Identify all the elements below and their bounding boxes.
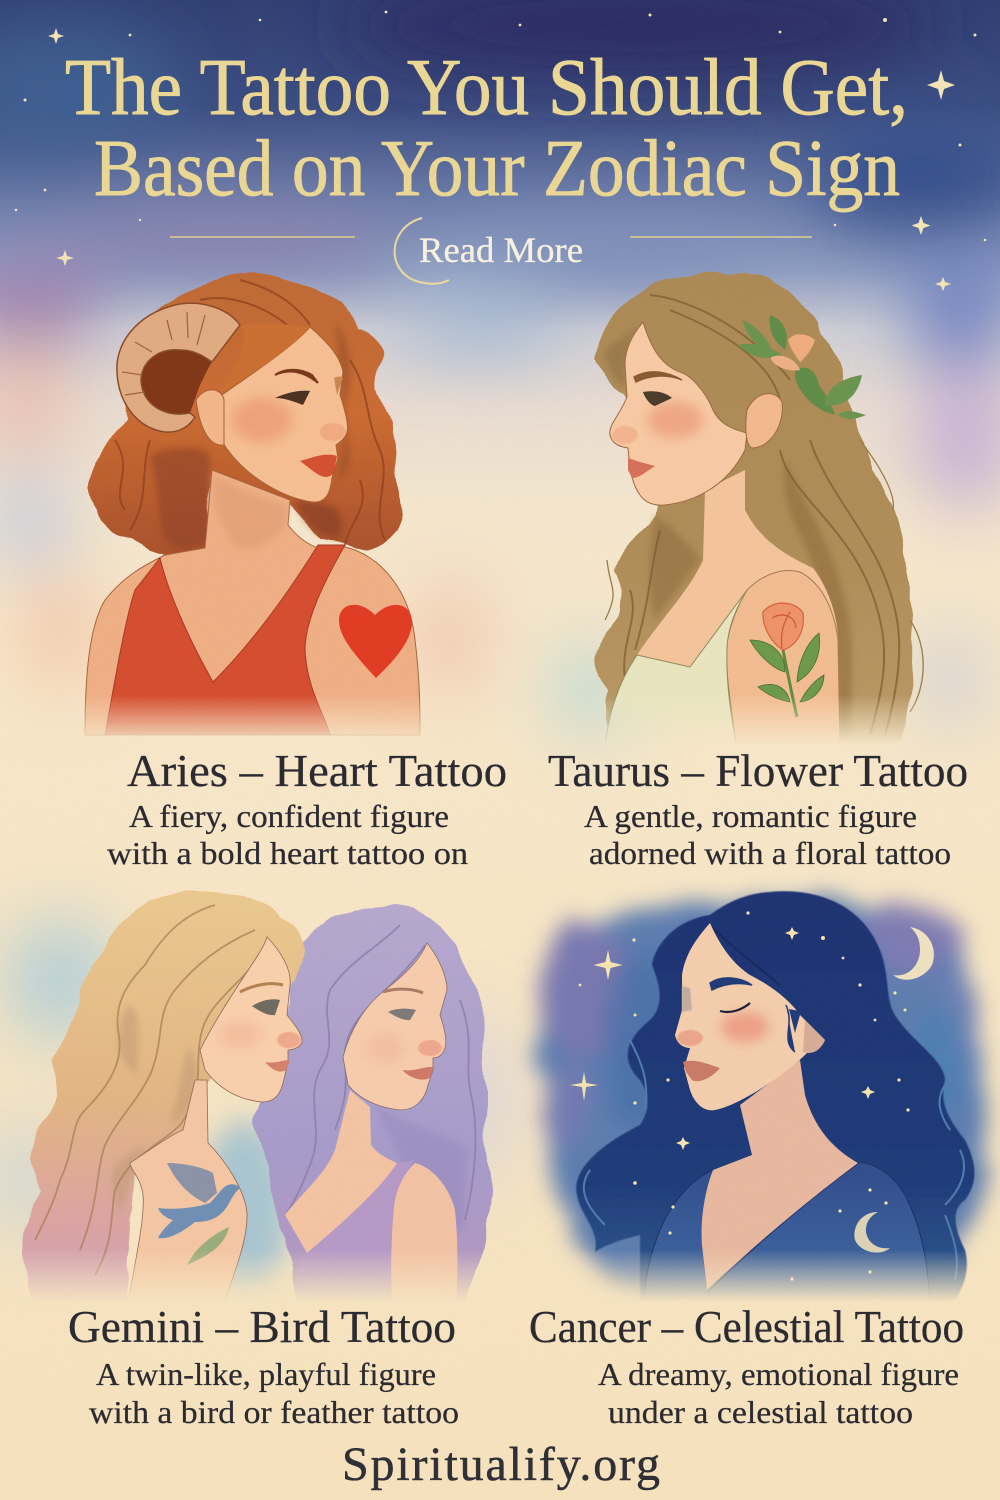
title: Based on Your Zodiac Sign: [94, 125, 900, 213]
Aries body: [85, 470, 420, 735]
Aries nose: [320, 423, 346, 441]
title: [65, 44, 908, 213]
heading and text: Cancer: Cancer – Celestial Tattoo: [529, 1301, 964, 1352]
Taurus ear: [746, 394, 782, 448]
Cancer blush: [721, 1012, 769, 1042]
Aries hair sweep: [254, 324, 310, 372]
heading and text: Cancer: under a celestial tattoo: [608, 1394, 913, 1430]
read more ornament: [170, 218, 812, 284]
Taurus blush: [647, 402, 703, 438]
Taurus hair: [596, 272, 923, 750]
heading and text: Aries: [107, 745, 507, 871]
blonde twin hair: [23, 891, 306, 1310]
Taurus face: [610, 322, 747, 505]
blonde twin face: [200, 937, 302, 1102]
stars: [15, 11, 986, 291]
Aries ear: [196, 390, 224, 445]
heading and text: Gemini: A twin-like, playful figure: [96, 1356, 436, 1392]
Taurus eye and brow: [634, 372, 682, 406]
Cancer closed eye and brow: [710, 978, 752, 1012]
Aries eye and brow: [275, 370, 343, 405]
illustration: Aries woman: [85, 272, 420, 735]
illustration: Gemini twins: [23, 891, 491, 1310]
blonde twin features: [218, 984, 301, 1072]
Aries lips: [300, 455, 337, 477]
Aries tank top: [105, 545, 345, 735]
Taurus hair flowers: [738, 315, 866, 419]
Taurus lips: [628, 458, 655, 478]
heading and text: Aries: A fiery, confident figure: [129, 798, 449, 834]
Cancer hair strand: [786, 1005, 800, 1052]
Cancer night-sky wash: [540, 899, 982, 1296]
blonde twin body: [127, 1080, 247, 1310]
Taurus flower tattoo: [750, 603, 824, 717]
lilac twin dress: [295, 1160, 415, 1310]
Aries neck shadow: [212, 475, 288, 549]
Aries horn: [117, 303, 240, 432]
Cancer stars: [570, 911, 910, 1281]
lilac twin chest: [285, 1090, 397, 1253]
icon: crescent tattoo: [854, 1212, 890, 1253]
read more ornament: Read More: [419, 230, 583, 270]
heading and text: Taurus: [548, 745, 968, 871]
Aries heart tattoo: [339, 605, 412, 678]
illustration: Cancer woman: [540, 891, 982, 1310]
Cancer lips: [683, 1061, 720, 1081]
footer brand: Spiritualify.org: [342, 1438, 660, 1491]
Cancer ear: [803, 1020, 825, 1053]
lilac twin arm: [391, 1163, 457, 1310]
lilac twin face: [343, 943, 447, 1110]
icon: crescent moon: [893, 927, 934, 980]
heading and text: Gemini: with a bird or feather tattoo: [89, 1394, 459, 1430]
heading and text: Gemini: [68, 1301, 459, 1430]
heading and text: Taurus: Taurus – Flower Tattoo: [548, 745, 968, 796]
Aries hair: [90, 272, 401, 558]
Cancer nose: [677, 1030, 703, 1046]
heading and text: Aries: with a bold heart tattoo on: [107, 835, 468, 871]
heading and text: Taurus: A gentle, romantic figure: [584, 798, 917, 834]
Taurus body: [638, 470, 838, 666]
heading and text: Aries: Aries – Heart Tattoo: [127, 745, 507, 796]
blue wash between twins: [200, 1120, 290, 1300]
Cancer dress: [643, 1162, 930, 1310]
Cancer face: [675, 923, 825, 1110]
illustration: Taurus woman: [596, 272, 923, 750]
icon: bird tattoo: [158, 1163, 240, 1265]
Cancer hair: [576, 891, 974, 1310]
heading and text: Cancer: [529, 1301, 964, 1430]
heading and text: Gemini: Gemini – Bird Tattoo: [68, 1301, 456, 1352]
Cancer forehead shadow: [682, 986, 692, 1012]
Taurus nose: [612, 426, 638, 444]
Aries face: [215, 327, 348, 502]
title: The Tattoo You Should Get,: [65, 44, 908, 132]
heading and text: Taurus: adorned with a floral tattoo: [589, 835, 951, 871]
Cancer neck and chest: [702, 1060, 858, 1290]
Taurus dress: [605, 590, 747, 750]
lilac twin features: [365, 989, 442, 1080]
lilac twin hair: [255, 905, 491, 1310]
Aries blush: [232, 398, 292, 442]
heading and text: Cancer: A dreamy, emotional figure: [598, 1356, 959, 1392]
Taurus arm: [727, 571, 840, 750]
